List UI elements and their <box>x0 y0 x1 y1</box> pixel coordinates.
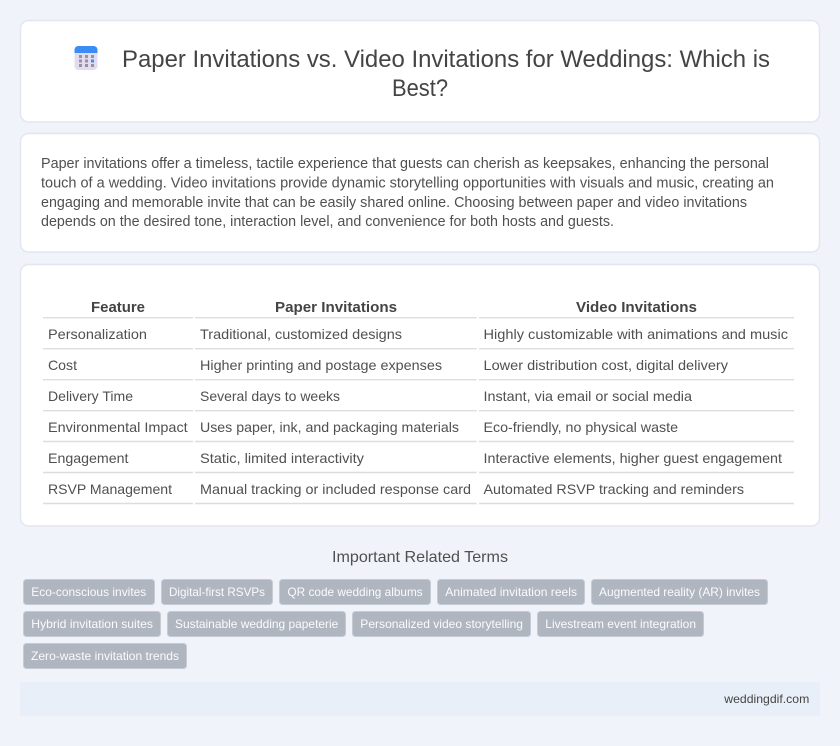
table header: Video Invitations <box>576 300 697 316</box>
tag: qr code wedding albums <box>280 580 430 604</box>
row: environmental impact: Eco-friendly, no physical waste <box>484 419 678 435</box>
title <box>122 46 770 102</box>
tag: eco-conscious invites <box>24 580 154 604</box>
row: environmental impact: Environmental Impact <box>48 419 188 435</box>
text block: description: touch of a wedding. Video invitations provide dynamic storytelling opportunities with visuals and music, creating an <box>41 176 774 192</box>
row: personalization: Personalization <box>48 326 147 342</box>
title: Paper Invitations vs. Video Invitations for Weddings: Which is <box>122 46 770 73</box>
tag: zero-waste invitation trends <box>24 644 186 668</box>
tag: sustainable wedding papeterie: Sustainable wedding papeterie <box>175 617 339 631</box>
row: cost: Lower distribution cost, digital delivery <box>484 357 728 373</box>
text block: description: Paper invitations offer a timeless, tactile experience that guests can cherish as keepsakes, enhancing the personal <box>41 156 769 172</box>
row: environmental impact: Uses paper, ink, and packaging materials <box>200 419 459 435</box>
heading: related terms: Important Related Terms <box>332 549 508 566</box>
tag: livestream event integration: Livestream event integration <box>545 617 696 631</box>
row: environmental impact <box>48 419 678 435</box>
tag: digital-first rsvps: Digital-first RSVPs <box>169 585 265 599</box>
tag: eco-conscious invites: Eco-conscious invites <box>31 585 146 599</box>
row: cost <box>48 357 728 373</box>
row: rsvp management: Manual tracking or included response card <box>200 481 471 497</box>
text block: description <box>41 156 774 230</box>
row: personalization: Traditional, customized designs <box>200 326 402 342</box>
text block: description: engaging and memorable invite that can be easily shared online. Choosing between paper and video invitations <box>41 195 747 211</box>
tag: personalized video storytelling <box>352 612 530 636</box>
tag: animated invitation reels: Animated invitation reels <box>445 585 577 599</box>
tag: livestream event integration <box>538 612 704 636</box>
text block: description: depends on the desired tone, interaction level, and convenience for both hosts and guests. <box>41 214 614 230</box>
tag: digital-first rsvps <box>162 580 272 604</box>
tag: personalized video storytelling: Personalized video storytelling <box>360 617 523 631</box>
tag list: related terms <box>24 580 768 668</box>
tag: augmented reality invites <box>592 580 768 604</box>
row: engagement: Engagement <box>48 450 129 466</box>
tag: sustainable wedding papeterie <box>168 612 346 636</box>
panel: comparison table <box>20 264 820 526</box>
icon: calendar <box>74 46 98 70</box>
row: rsvp management: RSVP Management <box>48 481 172 497</box>
tag: zero-waste invitation trends: Zero-waste invitation trends <box>31 649 179 663</box>
tag: hybrid invitation suites <box>24 612 160 636</box>
tag: hybrid invitation suites: Hybrid invitation suites <box>31 617 153 631</box>
tag: augmented reality invites: Augmented reality (AR) invites <box>599 585 760 599</box>
panel: header <box>20 20 820 122</box>
footer <box>20 682 820 716</box>
row: engagement: Static, limited interactivity <box>200 450 364 466</box>
row: delivery time: Instant, via email or social media <box>484 388 692 404</box>
table header: Paper Invitations <box>275 300 397 316</box>
footer: weddingdif.com <box>723 692 809 706</box>
row: cost: Cost <box>48 357 77 373</box>
tag: animated invitation reels <box>438 580 584 604</box>
table header <box>91 300 697 316</box>
tag: qr code wedding albums: QR code wedding albums <box>288 585 423 599</box>
row: delivery time: Delivery Time <box>48 388 133 404</box>
row: rsvp management <box>48 481 744 497</box>
row: engagement <box>48 450 782 466</box>
row: delivery time <box>48 388 692 404</box>
row: cost: Higher printing and postage expenses <box>200 357 442 373</box>
title: Best? <box>392 75 448 102</box>
panel: description <box>20 134 820 252</box>
row: personalization: Highly customizable with animations and music <box>484 326 788 342</box>
table header: Feature <box>91 300 145 316</box>
row: rsvp management: Automated RSVP tracking and reminders <box>484 481 744 497</box>
row: engagement: Interactive elements, higher guest engagement <box>484 450 782 466</box>
row: personalization <box>48 326 788 342</box>
row: delivery time: Several days to weeks <box>200 388 340 404</box>
table rules <box>43 318 794 504</box>
